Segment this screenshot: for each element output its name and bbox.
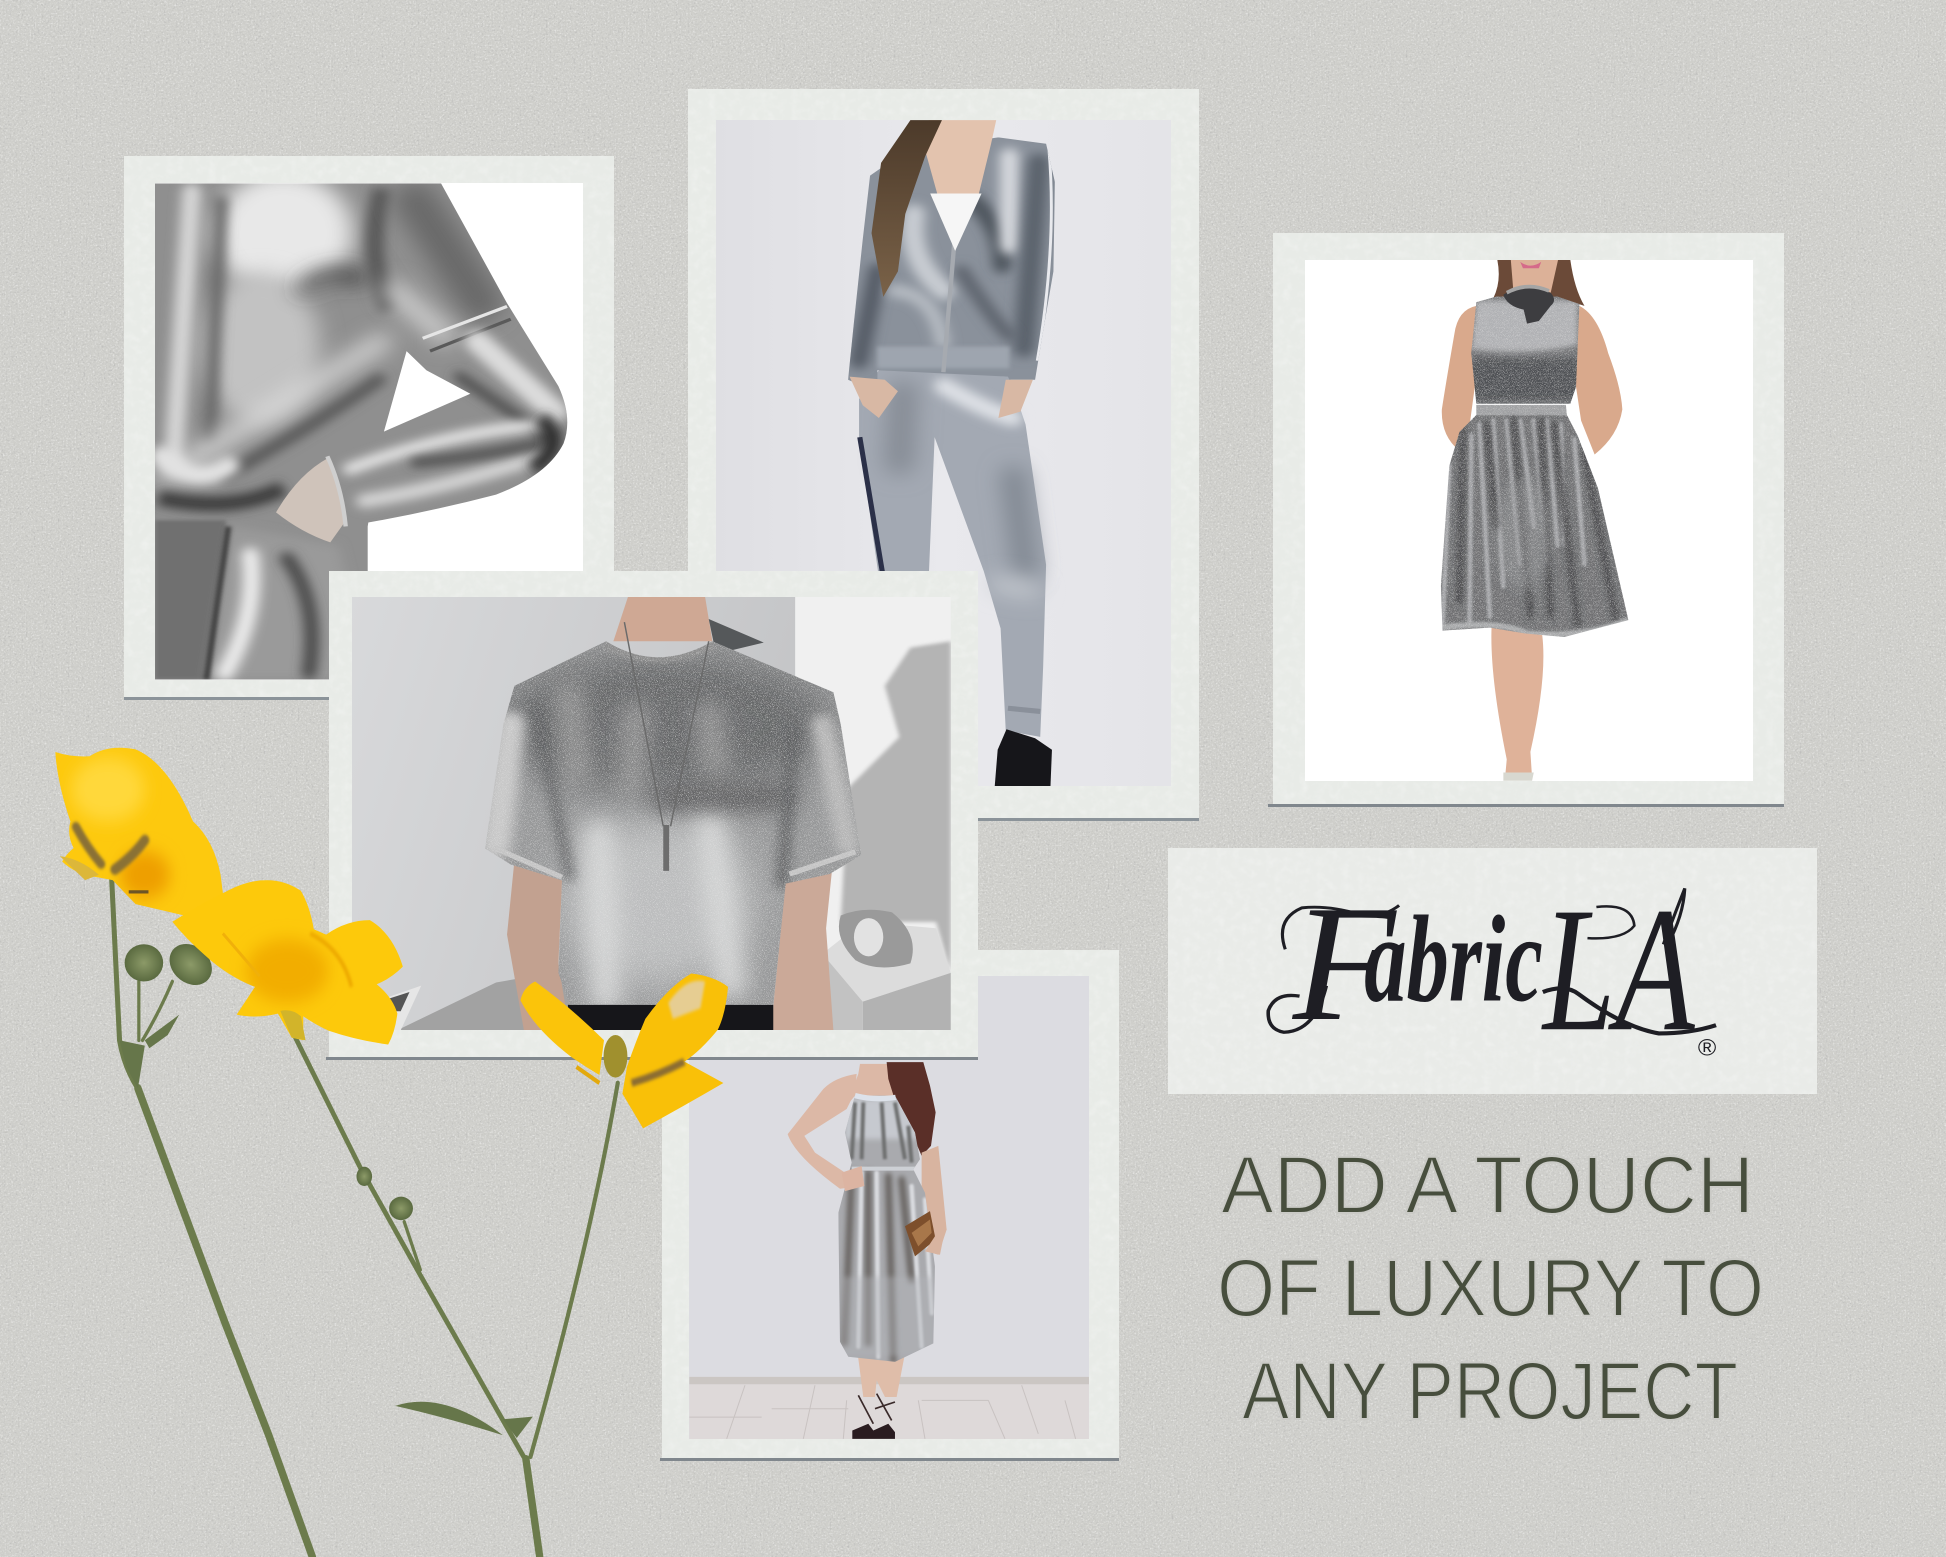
hands bbox=[850, 377, 1033, 418]
neck ruffle bbox=[1503, 288, 1554, 324]
metallic garment bbox=[144, 172, 584, 686]
face, neck bbox=[1511, 260, 1558, 293]
logo flourishes bbox=[1282, 905, 1399, 949]
shoe bbox=[995, 729, 1052, 786]
hand on hip bbox=[842, 1166, 864, 1191]
tagline: ADD A TOUCH bbox=[1221, 1140, 1754, 1231]
flower leaves and buds bbox=[120, 936, 533, 1438]
skin: arm bbox=[788, 1074, 865, 1189]
wall bbox=[352, 597, 795, 1030]
registered mark: ® bbox=[1698, 1035, 1717, 1061]
tagline bbox=[1217, 1140, 1764, 1437]
vase bbox=[839, 910, 913, 967]
necklace bbox=[624, 622, 709, 826]
plinth bbox=[822, 922, 951, 1002]
wall shadow bbox=[841, 641, 951, 973]
shoes bbox=[852, 1424, 895, 1439]
logo: FabricLA bbox=[1268, 872, 1717, 1069]
white top bbox=[930, 194, 982, 251]
panel: pleated silver dress photo bbox=[660, 950, 1119, 1461]
tagline: ANY PROJECT bbox=[1242, 1346, 1738, 1437]
neck and face bbox=[925, 120, 996, 195]
flower 2 bbox=[168, 869, 407, 1046]
flower 1 bbox=[48, 741, 232, 926]
jacket bbox=[848, 138, 1055, 382]
hair bbox=[1493, 260, 1584, 306]
panel: velvet tracksuit photo bbox=[688, 89, 1199, 821]
trousers bbox=[859, 367, 1046, 737]
clutch bbox=[905, 1211, 936, 1256]
flower stems bbox=[112, 880, 618, 1557]
hand in pocket bbox=[276, 458, 343, 542]
arms bbox=[507, 861, 569, 1030]
panel: metallic top close-up photo bbox=[124, 156, 614, 700]
neck and shoulders bbox=[847, 1064, 895, 1106]
dress bbox=[835, 1092, 938, 1367]
floor bbox=[689, 1377, 1089, 1441]
logo: FabricLA: abric bbox=[1364, 890, 1543, 1027]
arms and legs bbox=[1442, 306, 1622, 455]
tagline: OF LUXURY TO bbox=[1217, 1243, 1764, 1334]
neck bbox=[613, 597, 712, 641]
logo: FabricLA: F bbox=[1292, 872, 1397, 1056]
panel: silver t-shirt photo bbox=[326, 571, 978, 1060]
logo panel bbox=[1168, 848, 1817, 1094]
panel: velvet dress with pockets photo bbox=[1268, 233, 1784, 807]
hair bbox=[872, 120, 942, 297]
floor shadow bbox=[397, 970, 569, 1030]
logo: FabricLA: LA bbox=[1541, 872, 1695, 1069]
hair bbox=[887, 1062, 936, 1156]
dress bbox=[1436, 293, 1635, 643]
flower 3 bbox=[520, 974, 728, 1128]
black trousers bbox=[568, 1005, 773, 1030]
flowers bbox=[48, 741, 728, 1557]
small object bbox=[385, 986, 421, 1030]
shirt bbox=[481, 635, 866, 1011]
